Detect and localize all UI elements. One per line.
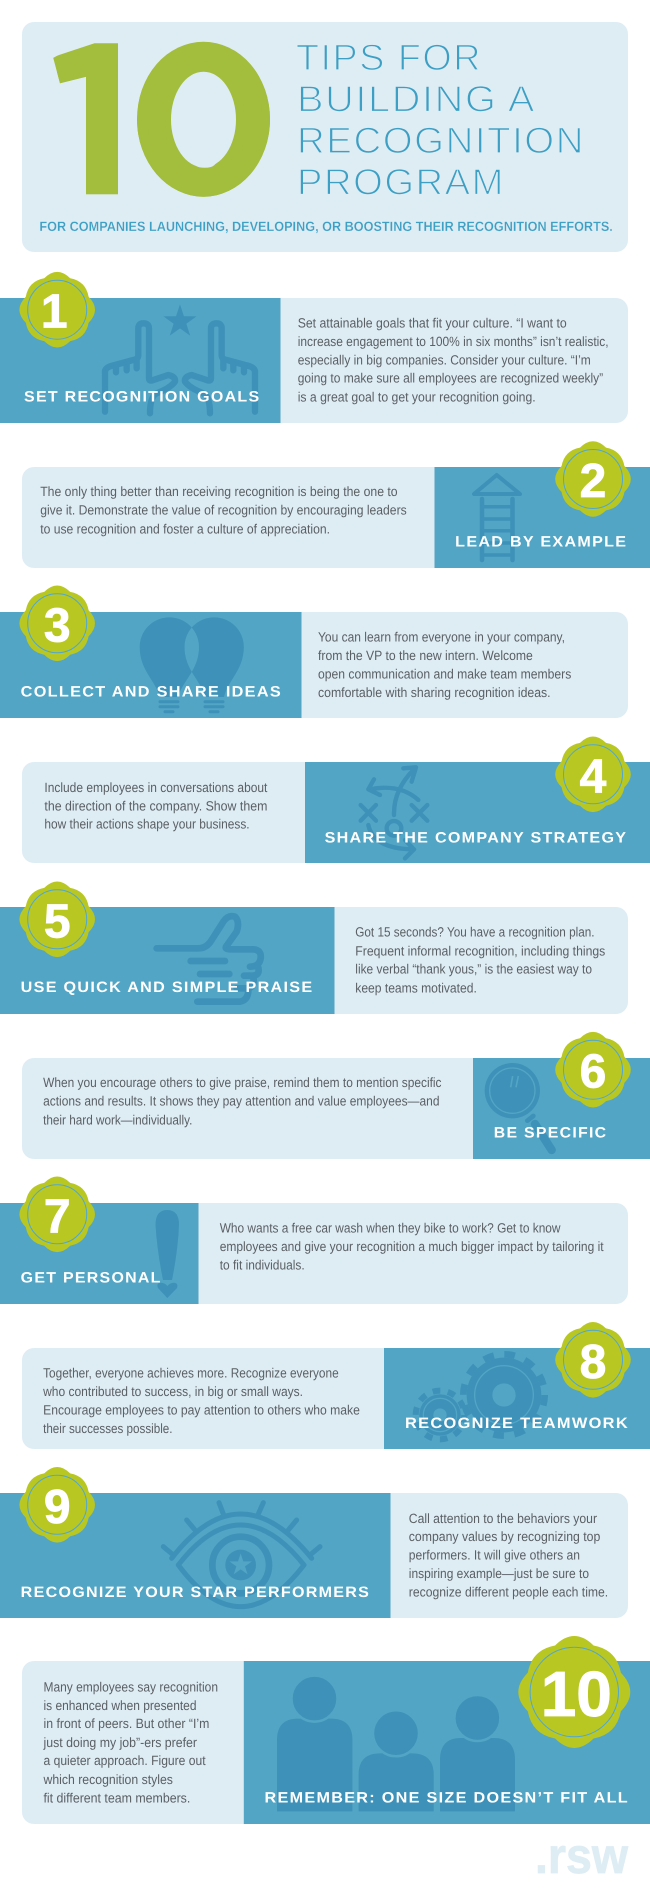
body text: actions and results. It shows they pay attention and value employees—and	[43, 1094, 439, 1109]
body text: company values by recognizing top	[409, 1529, 600, 1544]
body text: which recognition styles	[43, 1772, 173, 1787]
title: PROGRAM	[297, 161, 505, 202]
badge 1	[19, 272, 95, 347]
heading: LEAD BY EXAMPLE	[455, 534, 627, 551]
heading: USE QUICK AND SIMPLE PRAISE	[21, 979, 313, 996]
heading: SHARE THE COMPANY STRATEGY	[325, 829, 627, 846]
panel: tip 4 blue block	[305, 762, 650, 863]
panel: tip 6 text background	[22, 1058, 628, 1159]
body text: how their actions shape your business.	[44, 817, 250, 832]
body text: going to make sure all employees are recognized weekly”	[298, 371, 603, 386]
body text	[318, 629, 572, 700]
body text	[298, 315, 609, 404]
heading: COLLECT AND SHARE IDEAS	[21, 684, 282, 701]
badge 4	[555, 737, 631, 812]
panel: tip 9 text background	[22, 1493, 628, 1618]
body text: You can learn from everyone in your company,	[318, 629, 565, 644]
body text: is a great goal to get your recognition going.	[298, 389, 536, 404]
body text: fit different team members.	[44, 1791, 190, 1806]
icon: strategy play diagram	[361, 767, 427, 858]
panel: tip 7 text background	[22, 1203, 628, 1304]
heading: BE SPECIFIC	[494, 1125, 607, 1142]
body text	[355, 925, 606, 995]
body text	[43, 1075, 442, 1127]
heading: RECOGNIZE TEAMWORK	[405, 1415, 629, 1432]
body text	[43, 1680, 218, 1806]
body text: like verbal “thank yous,” is the easiest way to	[355, 962, 592, 977]
title: RECOGNITION	[297, 120, 585, 161]
icon: magnifying glass	[485, 1063, 552, 1150]
body text: a quieter approach. Figure out	[44, 1753, 206, 1768]
badge 4: 4	[580, 750, 607, 803]
panel: tip 4 text background	[22, 762, 628, 863]
body text: employees and give your recognition a much bigger impact by tailoring it	[220, 1239, 604, 1254]
title	[296, 37, 585, 202]
panel: tip 8 text background	[22, 1348, 628, 1449]
badge 10: 10	[541, 1658, 612, 1730]
body text: from the VP to the new intern. Welcome	[318, 648, 533, 663]
subtitle: FOR COMPANIES LAUNCHING, DEVELOPING, OR BOOSTING THEIR RECOGNITION EFFORTS.	[39, 219, 613, 234]
panel: tip 2 blue block	[434, 467, 650, 568]
body text: comfortable with sharing recognition ideas.	[318, 685, 551, 700]
badge 8: 8	[580, 1336, 606, 1389]
panel: tip 3 text background	[22, 612, 628, 718]
badge 1: 1	[41, 286, 68, 339]
body text: to fit individuals.	[220, 1258, 305, 1273]
panel: tip 10 text background	[22, 1661, 628, 1824]
body text	[220, 1220, 604, 1273]
badge 3: 3	[44, 599, 71, 652]
badge 7: 7	[44, 1190, 71, 1243]
header background	[22, 22, 628, 252]
body text	[44, 780, 268, 832]
icon: three people	[277, 1676, 515, 1811]
panel: tip 3 blue block	[0, 612, 302, 718]
body text: Call attention to the behaviors your	[409, 1511, 597, 1526]
panel: tip 9 blue block	[0, 1493, 390, 1618]
tip 7	[0, 1177, 628, 1304]
panel: tip 7 blue block	[0, 1203, 198, 1304]
tip 4	[22, 737, 650, 863]
body text: performers. It will give others an	[409, 1548, 580, 1562]
badge 7	[19, 1177, 95, 1252]
body text: Encourage employees to pay attention to others who make	[43, 1403, 360, 1418]
body text: Frequent informal recognition, including things	[355, 943, 606, 958]
badge 8	[555, 1322, 631, 1398]
body text: inspiring example—just be sure to	[409, 1566, 589, 1581]
panel: tip 1 text background	[22, 298, 628, 423]
tip 3	[0, 586, 628, 718]
body text	[42, 1366, 360, 1436]
body text: give it. Demonstrate the value of recognition by encouraging leaders	[40, 503, 407, 518]
icon: gears	[416, 1354, 545, 1439]
big number 10: 0	[126, 1, 285, 243]
panel: tip 5 text background	[22, 907, 628, 1014]
body text: Many employees say recognition	[44, 1680, 218, 1694]
body text: recognize different people each time.	[409, 1584, 608, 1600]
body text: Set attainable goals that fit your culture. “I want to	[298, 315, 567, 330]
body text: open communication and make team members	[318, 667, 572, 682]
badge 5: 5	[44, 895, 71, 948]
body text: keep teams motivated.	[355, 980, 477, 995]
badge 9	[19, 1467, 95, 1543]
title: TIPS FOR	[296, 37, 482, 78]
big number 10: 1	[38, 2, 179, 239]
icon: hands pointing at star	[105, 304, 255, 413]
body text: their hard work—individually.	[43, 1112, 192, 1127]
body text	[40, 484, 407, 536]
tip 5	[0, 882, 628, 1014]
panel: tip 6 blue block	[473, 1058, 650, 1159]
icon: exclamation mark with heart	[156, 1210, 179, 1298]
body text: Who wants a free car wash when they bike to work? Get to know	[220, 1220, 561, 1235]
tip 8	[22, 1322, 650, 1449]
badge 2	[555, 441, 631, 517]
body text: especially in big companies. Consider your culture. “I’m	[298, 352, 591, 367]
panel: tip 1 blue block	[0, 298, 280, 423]
body text	[409, 1511, 608, 1600]
panel: tip 10 blue block	[244, 1661, 650, 1824]
badge 6	[555, 1032, 631, 1107]
tip 1	[0, 272, 628, 423]
heading: REMEMBER: ONE SIZE DOESN’T FIT ALL	[264, 1790, 629, 1807]
body text: in front of peers. But other “I’m	[44, 1716, 209, 1731]
tip 10	[22, 1636, 650, 1824]
badge 3	[19, 586, 95, 661]
title: BUILDING A	[297, 79, 536, 120]
icon: thumbs up	[157, 916, 261, 1002]
badge 2: 2	[580, 455, 606, 508]
heading: RECOGNIZE YOUR STAR PERFORMERS	[21, 1584, 370, 1601]
badge 5	[19, 882, 95, 957]
body text: just doing my job”-ers prefer	[43, 1735, 197, 1750]
body text: Got 15 seconds? You have a recognition plan.	[355, 925, 594, 940]
body text: to use recognition and foster a culture of appreciation.	[40, 521, 330, 536]
body text: the direction of the company. Show them	[44, 798, 267, 813]
heading: SET RECOGNITION GOALS	[24, 388, 260, 405]
badge 9: 9	[44, 1481, 71, 1534]
body text: who contributed to success, in big or small ways.	[42, 1384, 303, 1399]
badge 6: 6	[580, 1046, 606, 1099]
header panel	[22, 1, 628, 252]
icon: two light bulbs	[140, 617, 244, 712]
body text: is enhanced when presented	[44, 1698, 196, 1713]
icon: ladder	[474, 475, 520, 560]
body text: Include employees in conversations about	[44, 780, 268, 795]
badge 10	[518, 1636, 630, 1748]
icon: eye with star	[163, 1503, 320, 1607]
body text: their successes possible.	[43, 1421, 172, 1436]
panel: tip 5 blue block	[0, 907, 334, 1014]
body text: increase engagement to 100% in six months” isn’t realistic,	[298, 334, 609, 349]
logo: .rsw: .rsw	[535, 1828, 628, 1884]
heading: GET PERSONAL	[21, 1270, 162, 1287]
tip 6	[22, 1032, 650, 1159]
body text: The only thing better than receiving recognition is being the one to	[40, 484, 398, 499]
body text: When you encourage others to give praise, remind them to mention specific	[43, 1075, 442, 1090]
big number 10	[53, 42, 270, 197]
body text: Together, everyone achieves more. Recognize everyone	[43, 1366, 339, 1381]
tip 2	[22, 441, 650, 568]
tip 9	[0, 1467, 628, 1618]
panel: tip 2 text background	[22, 467, 628, 568]
panel: tip 8 blue block	[384, 1348, 650, 1449]
